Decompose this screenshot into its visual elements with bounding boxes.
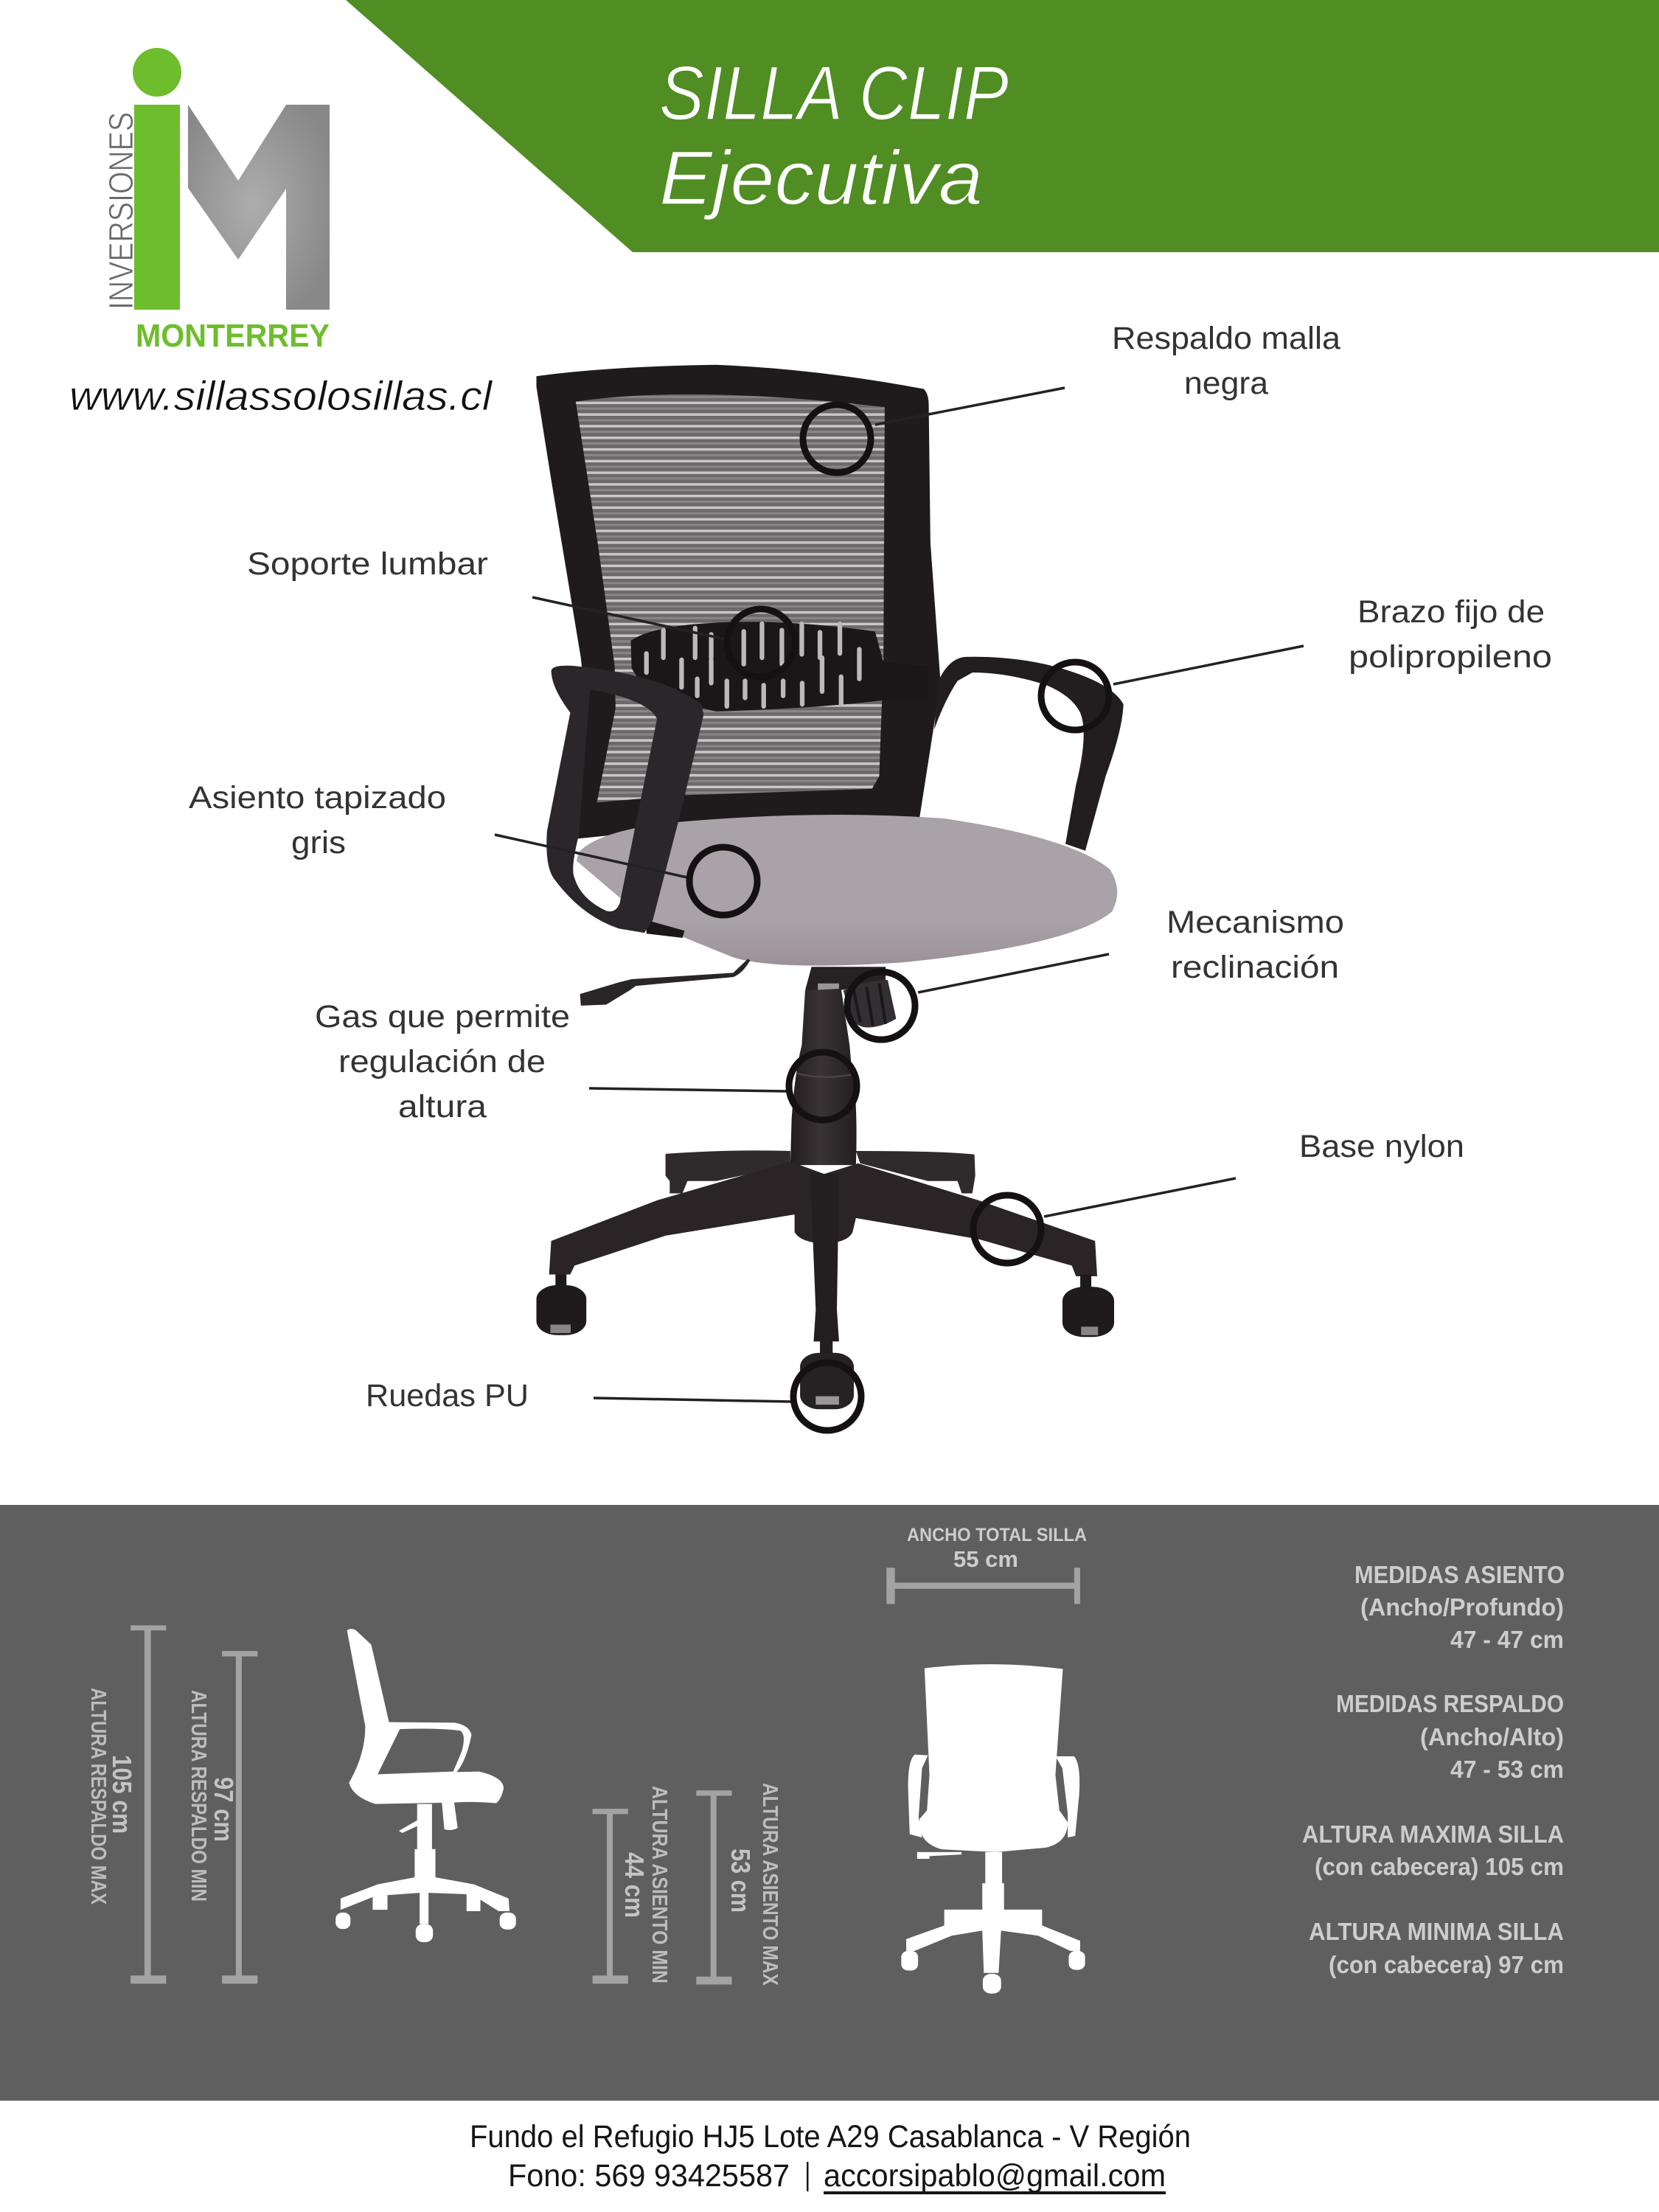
lumbar support (630, 622, 928, 712)
width dimension (886, 1525, 1087, 1604)
callout: Asiento tapizado gris: Asiento tapizado (189, 780, 446, 815)
chair lower: lever, gas lift, base and wheels (536, 959, 1114, 1409)
spec: seat measures (1354, 1561, 1565, 1653)
spec: seat measures: MEDIDAS ASIENTO (1354, 1561, 1565, 1588)
dimension labels: 105 cm (107, 1755, 137, 1834)
seat (577, 815, 1117, 966)
callout: Base nylon (973, 1129, 1464, 1263)
chair photo illustration (536, 365, 1124, 1409)
spec: seat measures: 47 - 47 cm (1450, 1626, 1564, 1653)
wheels (555, 1274, 566, 1287)
title: Ejecutiva (659, 136, 983, 221)
spec: min height: ALTURA MINIMA SILLA (1309, 1918, 1564, 1945)
callout: Gas que permite regulacion de altura: regulación de (338, 1044, 546, 1079)
panel: dimensions (0, 1505, 1659, 2101)
callout: Gas que permite regulacion de altura: altura (398, 1089, 487, 1124)
rear legs (666, 1150, 975, 1193)
callout: Base nylon: Base nylon (1299, 1129, 1464, 1164)
spec: seat measures: (Ancho/Profundo) (1360, 1593, 1564, 1621)
footer contact: accorsipablo@gmail.com (824, 2158, 1166, 2194)
width dimension: ANCHO TOTAL SILLA (907, 1525, 1087, 1545)
icon: chair side silhouette (335, 1629, 516, 1942)
spec: max height: (con cabecera) 105 cm (1315, 1853, 1564, 1880)
spec: backrest measures: 47 - 53 cm (1450, 1756, 1564, 1783)
dimension labels: 44 cm (619, 1852, 650, 1918)
spec: max height: ALTURA MAXIMA SILLA (1302, 1820, 1564, 1848)
callout: Mecanismo reclinacion (847, 905, 1344, 1040)
callout: Mecanismo reclinacion: Mecanismo (1166, 905, 1344, 940)
header banner (346, 0, 1659, 252)
callout: Asiento tapizado gris: gris (291, 825, 346, 860)
callout: Ruedas PU: Ruedas PU (366, 1378, 529, 1413)
width dimension: 55 cm (953, 1546, 1018, 1572)
callout: Soporte lumbar: Soporte lumbar (247, 546, 488, 582)
website url: www.sillassolosillas.cl (69, 372, 493, 419)
dimension labels: ALTURA RESPALDO MIN (187, 1690, 210, 1902)
dimension labels: ALTURA ASIENTO MIN (647, 1786, 671, 1983)
dimension labels: ALTURA RESPALDO MAX (86, 1688, 110, 1905)
callout: Gas que permite regulacion de altura (315, 999, 857, 1124)
callout: Brazo fijo de polipropileno (1041, 594, 1552, 730)
callout: Gas que permite regulacion de altura: Gas que permite (315, 999, 570, 1034)
height dimension bars (131, 1625, 732, 1985)
dimension labels: 53 cm (726, 1848, 756, 1913)
callout: Brazo fijo de polipropileno: polipropileno (1349, 639, 1552, 675)
icon: chair front silhouette (901, 1664, 1085, 1994)
spec: min height: (con cabecera) 97 cm (1329, 1951, 1564, 1978)
dimension labels (86, 1688, 782, 1986)
right arm (934, 657, 1124, 851)
callout: Respaldo malla negra: Respaldo malla (1112, 321, 1340, 356)
spec: backrest measures (1336, 1690, 1564, 1783)
footer contact: Fono: 569 93425587 (508, 2158, 790, 2194)
spec: backrest measures: (Ancho/Alto) (1420, 1723, 1564, 1750)
footer contact (470, 2119, 1191, 2194)
spec: backrest measures: MEDIDAS RESPALDO (1336, 1690, 1564, 1717)
mechanism and knob (805, 967, 896, 1028)
footer contact: Fundo el Refugio HJ5 Lote A29 Casablanca - V Región (470, 2119, 1191, 2154)
callout: Ruedas PU (366, 1363, 861, 1430)
lever (580, 959, 750, 1006)
logo: Inversiones Monterrey (102, 48, 330, 354)
callout: Brazo fijo de polipropileno: Brazo fijo de (1357, 594, 1545, 630)
dimension labels: ALTURA ASIENTO MAX (758, 1783, 782, 1986)
spec: max height (1302, 1820, 1564, 1880)
title: SILLA CLIP (659, 51, 1009, 136)
specs text (1302, 1561, 1565, 1978)
backrest frame (536, 365, 941, 840)
gas column (790, 989, 857, 1165)
title (659, 51, 1009, 221)
callout: Soporte lumbar (247, 546, 795, 677)
callout: Mecanismo reclinacion: reclinación (1171, 950, 1339, 985)
chair upper: backrest, seat and arms (536, 365, 1124, 966)
logo: Inversiones Monterrey: MONTERREY (136, 318, 330, 354)
callout: Respaldo malla negra (803, 321, 1340, 473)
logo: Inversiones Monterrey: INVERSIONES (102, 112, 140, 310)
mesh (576, 394, 885, 802)
spec: min height (1309, 1918, 1564, 1978)
left arm (546, 666, 703, 933)
dark clip under arm (647, 920, 684, 938)
front legs (549, 1161, 1097, 1276)
callout: Asiento tapizado gris (189, 780, 757, 915)
callout: Respaldo malla negra: negra (1184, 366, 1268, 401)
dimension labels: 97 cm (209, 1777, 239, 1842)
